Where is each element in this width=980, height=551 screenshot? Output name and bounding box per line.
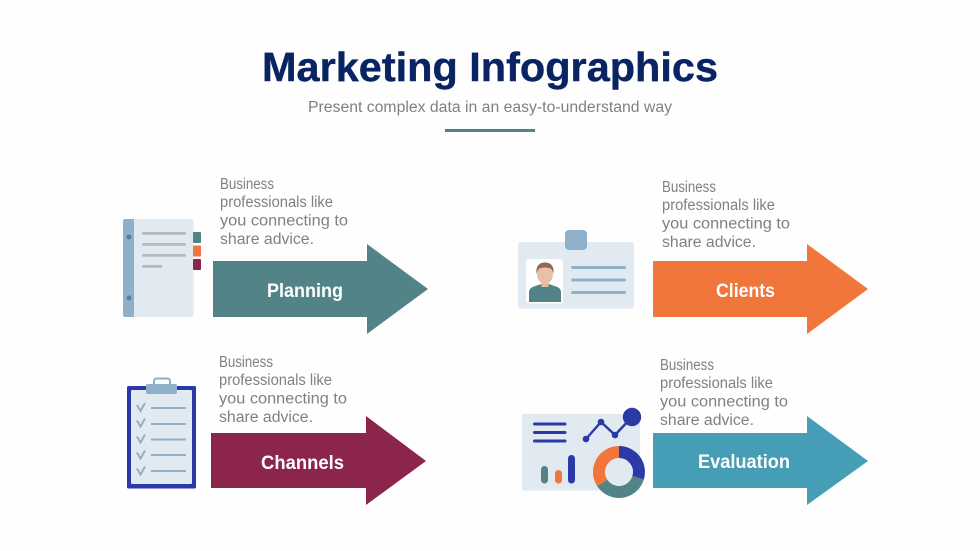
- text: evaluation description: you connecting to: [660, 394, 788, 410]
- panel: evaluation: [522, 357, 868, 505]
- icon: id card: [518, 230, 634, 308]
- text: evaluation description: [660, 357, 788, 429]
- title: Marketing Infographics: [262, 44, 718, 90]
- arrow: planning: [213, 244, 428, 334]
- text: evaluation description: share advice.: [660, 412, 754, 429]
- panel: clients: [518, 179, 868, 334]
- text: planning description: Business: [220, 176, 274, 193]
- label: clients: Clients: [716, 281, 775, 302]
- title underline: [445, 129, 535, 132]
- text: planning description: you connecting to: [220, 212, 348, 230]
- label: evaluation: Evaluation: [698, 452, 790, 473]
- text: planning description: [220, 176, 348, 248]
- arrow: evaluation: [653, 416, 868, 505]
- text: channels description: you connecting to: [219, 390, 347, 408]
- icon: notebook: [123, 219, 201, 317]
- panel: planning: [123, 176, 428, 334]
- text: clients description: professionals like: [662, 197, 775, 214]
- text: evaluation description: Business: [660, 357, 714, 374]
- text: planning description: professionals like: [220, 194, 333, 211]
- label: channels: Channels: [261, 453, 344, 474]
- text: evaluation description: professionals like: [660, 375, 773, 392]
- label: planning: Planning: [267, 281, 343, 302]
- text: channels description: [219, 354, 347, 426]
- text: clients description: Business: [662, 179, 716, 196]
- text: channels description: share advice.: [219, 409, 313, 426]
- text: clients description: [662, 179, 790, 251]
- arrow: channels: [211, 416, 426, 505]
- icon: analytics dashboard: [522, 408, 641, 492]
- subtitle: Present complex data in an easy-to-understand way: [308, 99, 672, 116]
- panel: channels: [127, 354, 426, 505]
- text: clients description: share advice.: [662, 234, 756, 251]
- icon: clipboard: [127, 378, 196, 488]
- text: channels description: professionals like: [219, 372, 332, 389]
- arrow: clients: [653, 244, 868, 334]
- text: clients description: you connecting to: [662, 216, 790, 232]
- text: planning description: share advice.: [220, 231, 314, 248]
- text: channels description: Business: [219, 354, 273, 371]
